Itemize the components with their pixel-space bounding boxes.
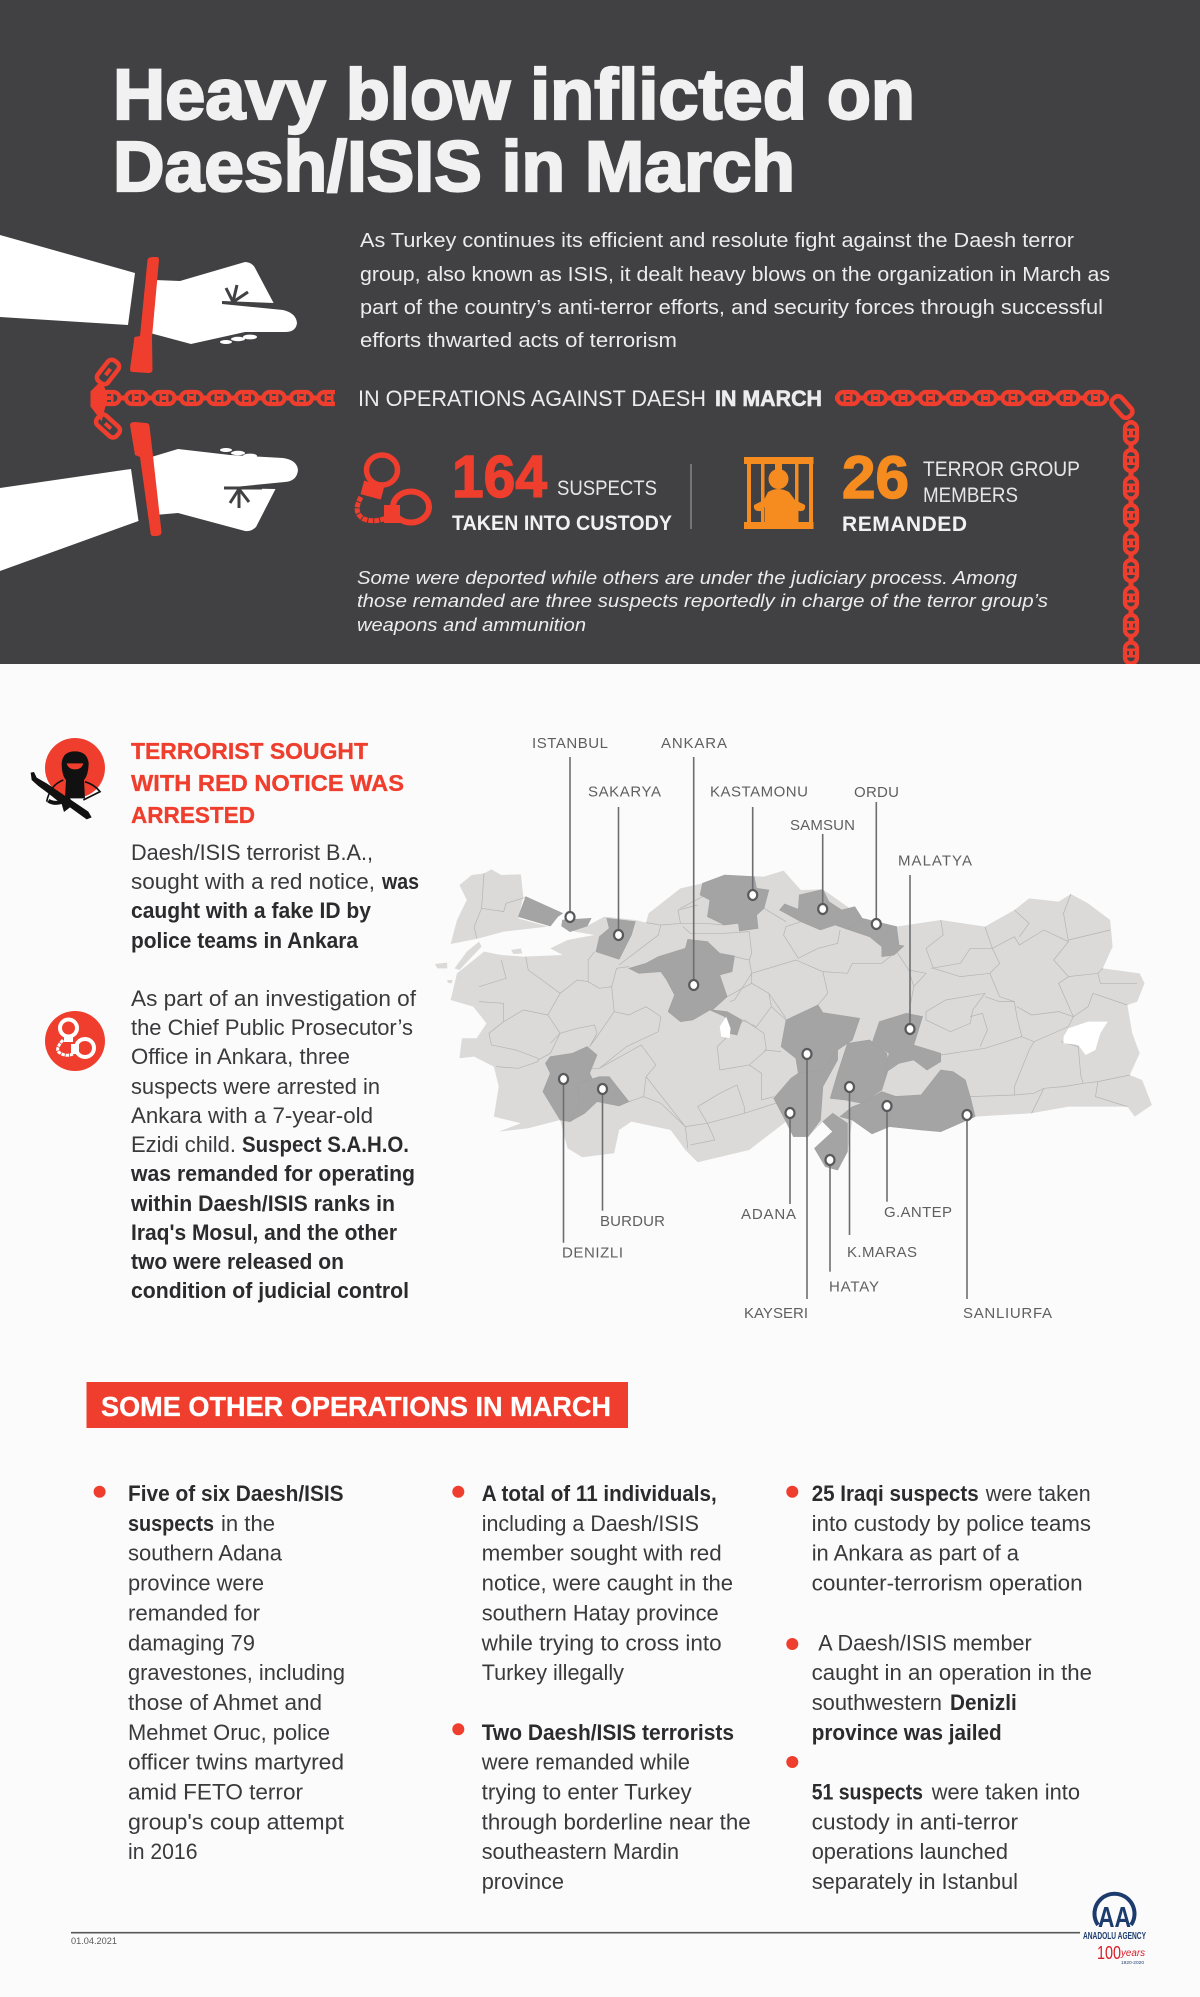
stat: 26 terror group members: TERROR GROUP bbox=[923, 458, 1080, 481]
map: province labels: SANLIURFA bbox=[963, 1305, 1052, 1322]
stat: 164 suspects bbox=[452, 444, 672, 535]
column 2: Hatay and Mardin: notice, were caught in the bbox=[482, 1571, 733, 1596]
text: red notice heading bbox=[131, 738, 404, 828]
column 3: Ankara, Denizli, Istanbul: custody in anti-terror bbox=[812, 1809, 1018, 1834]
map: province labels: ORDU bbox=[854, 784, 899, 801]
italic note bbox=[357, 567, 1048, 635]
intro text: part of the country’s anti-terror efforts, and security forces through successful bbox=[360, 297, 1103, 319]
column 3: Ankara, Denizli, Istanbul: into custody by police teams bbox=[812, 1511, 1091, 1536]
map: province labels: SAMSUN bbox=[790, 817, 855, 834]
footer: rule: 01.04.2021 bbox=[71, 1936, 117, 1946]
logo: Anadolu Agency: years bbox=[1120, 1948, 1145, 1959]
column 2: Hatay and Mardin: through borderline near the bbox=[482, 1809, 751, 1834]
chain: left bbox=[92, 358, 335, 440]
column 3: Ankara, Denizli, Istanbul: were taken bbox=[985, 1481, 1091, 1506]
map: leader lines bbox=[564, 757, 967, 1299]
column 3: Ankara, Denizli, Istanbul: southwestern bbox=[812, 1690, 942, 1715]
intro text: efforts thwarted acts of terrorism bbox=[360, 330, 677, 352]
text: red notice body: police teams in Ankara bbox=[131, 928, 359, 953]
icon: prisoner behind bars bbox=[744, 457, 814, 529]
title: Daesh/ISIS in March bbox=[113, 128, 795, 207]
text: investigation body: Office in Ankara, three bbox=[131, 1044, 350, 1069]
map: province labels: DENIZLI bbox=[562, 1244, 623, 1262]
column 1: gravestones: in 2016 bbox=[128, 1839, 198, 1864]
column 1: gravestones: officer twins martyred bbox=[128, 1750, 344, 1775]
stat: 26 terror group members: MEMBERS bbox=[923, 484, 1018, 507]
icon: masked terrorist bbox=[31, 738, 105, 819]
column 1: gravestones bbox=[94, 1481, 345, 1864]
logo: Anadolu Agency: 1920-2020 bbox=[1121, 1960, 1145, 1965]
column 2: Hatay and Mardin: province bbox=[482, 1869, 564, 1894]
column 2: Hatay and Mardin: while trying to cross into bbox=[481, 1630, 722, 1655]
text: investigation body: As part of an investigation of bbox=[131, 986, 417, 1011]
column 3: Ankara, Denizli, Istanbul: 51 suspects bbox=[812, 1780, 923, 1804]
text: investigation body: Ezidi child. bbox=[131, 1132, 236, 1157]
column 2: Hatay and Mardin: southern Hatay province bbox=[482, 1600, 719, 1625]
text: investigation body: the Chief Public Prosecutor’s bbox=[131, 1015, 413, 1040]
column 2: Hatay and Mardin: trying to enter Turkey bbox=[482, 1780, 692, 1804]
intro text bbox=[360, 230, 1110, 352]
logo: Anadolu Agency bbox=[1083, 1894, 1146, 1965]
text: investigation body: within Daesh/ISIS ranks in bbox=[130, 1191, 395, 1216]
text: investigation body: was remanded for operating bbox=[130, 1161, 415, 1186]
stat: 26 terror group members: REMANDED bbox=[842, 513, 967, 536]
map: province labels: ISTANBUL bbox=[532, 735, 608, 752]
text: investigation body: two were released on bbox=[131, 1249, 344, 1274]
column 2: Hatay and Mardin: member sought with red bbox=[482, 1541, 722, 1566]
column 1: gravestones: Mehmet Oruc, police bbox=[128, 1720, 330, 1745]
text: red notice body bbox=[131, 840, 419, 953]
heading: in operations: IN OPERATIONS AGAINST DAESH bbox=[358, 386, 706, 411]
logo: Anadolu Agency: 100 bbox=[1097, 1943, 1121, 1963]
italic note: weapons and ammunition bbox=[357, 614, 586, 635]
intro text: group, also known as ISIS, it dealt heavy blows on the organization in March as bbox=[360, 264, 1110, 286]
text: investigation body: Iraq's Mosul, and the other bbox=[131, 1220, 397, 1245]
map: province labels: ANKARA bbox=[661, 735, 727, 752]
column 3: Ankara, Denizli, Istanbul: 25 Iraqi suspects bbox=[812, 1481, 979, 1506]
text: investigation body: Ankara with a 7-year-old bbox=[131, 1103, 373, 1128]
column 3: Ankara, Denizli, Istanbul: province was jailed bbox=[812, 1720, 1002, 1745]
text: red notice heading: ARRESTED bbox=[131, 802, 255, 828]
chain: right bbox=[835, 388, 1141, 664]
column 1: gravestones: remanded for bbox=[128, 1600, 260, 1625]
column 1: gravestones: damaging 79 bbox=[128, 1630, 255, 1655]
text: red notice body: Daesh/ISIS terrorist B.A., bbox=[131, 840, 373, 865]
column 2: Hatay and Mardin: Turkey illegally bbox=[482, 1660, 624, 1685]
text: investigation body: Suspect S.A.H.O. bbox=[242, 1132, 409, 1157]
column 1: gravestones: southern Adana bbox=[128, 1541, 283, 1566]
column 3: Ankara, Denizli, Istanbul: caught in an operation in the bbox=[812, 1660, 1092, 1685]
text: red notice body: caught with a fake ID by bbox=[131, 898, 372, 923]
text: red notice heading: WITH RED NOTICE WAS bbox=[131, 770, 404, 796]
column 1: gravestones: gravestones, including bbox=[128, 1660, 345, 1685]
text: investigation body bbox=[130, 986, 417, 1303]
column 2: Hatay and Mardin: Two Daesh/ISIS terrorists bbox=[482, 1720, 734, 1745]
text: investigation body: condition of judicial control bbox=[131, 1278, 409, 1303]
map: province labels: ADANA bbox=[741, 1206, 796, 1223]
map: Turkey provinces bbox=[435, 869, 1152, 1170]
column 1: gravestones: group's coup attempt bbox=[128, 1809, 344, 1834]
map: province labels: BURDUR bbox=[600, 1213, 665, 1230]
column 3: Ankara, Denizli, Istanbul: in Ankara as part of a bbox=[812, 1541, 1020, 1566]
illustration: cuffed hands bbox=[0, 235, 298, 571]
column 1: gravestones: those of Ahmet and bbox=[128, 1690, 322, 1715]
stat: 26 terror group members bbox=[842, 444, 1080, 536]
icon: handcuffs badge bbox=[45, 1011, 105, 1071]
stat: 164 suspects: TAKEN INTO CUSTODY bbox=[452, 512, 672, 535]
map: location pins bbox=[559, 890, 972, 1165]
column 2: Hatay and Mardin: were remanded while bbox=[481, 1750, 690, 1775]
text: red notice heading: TERRORIST SOUGHT bbox=[131, 738, 368, 764]
stat: 26 terror group members: 26 bbox=[842, 444, 909, 511]
stat: 164 suspects: 164 bbox=[452, 444, 547, 510]
column 3: Ankara, Denizli, Istanbul: Denizli bbox=[950, 1690, 1017, 1715]
column 1: gravestones: suspects bbox=[128, 1511, 214, 1536]
column 2: Hatay and Mardin: A total of 11 individuals, bbox=[482, 1481, 717, 1506]
column 1: gravestones: amid FETO terror bbox=[128, 1780, 303, 1804]
column 3: Ankara, Denizli, Istanbul bbox=[786, 1481, 1092, 1894]
column 1: gravestones: Five of six Daesh/ISIS bbox=[128, 1481, 344, 1506]
column 3: Ankara, Denizli, Istanbul: operations launched bbox=[812, 1839, 1008, 1864]
logo: Anadolu Agency: ANADOLU AGENCY bbox=[1083, 1931, 1146, 1942]
panel: dark header bbox=[0, 0, 1200, 664]
map: province labels: KAYSERI bbox=[744, 1305, 808, 1322]
banner: some other operations: SOME OTHER OPERATIONS IN MARCH bbox=[101, 1391, 611, 1422]
stat: 164 suspects: SUSPECTS bbox=[557, 477, 657, 500]
column 2: Hatay and Mardin bbox=[452, 1481, 751, 1894]
banner: some other operations bbox=[86, 1382, 628, 1428]
text: red notice body: was bbox=[381, 869, 419, 894]
logo: Anadolu Agency: AA bbox=[1098, 1902, 1131, 1934]
map: province labels: G.ANTEP bbox=[884, 1204, 952, 1221]
column 2: Hatay and Mardin: southeastern Mardin bbox=[482, 1839, 679, 1864]
column 1: gravestones: in the bbox=[221, 1511, 275, 1536]
icon: handcuffs bbox=[357, 455, 429, 523]
text: red notice body: sought with a red notice, bbox=[131, 869, 375, 894]
map: province labels: KASTAMONU bbox=[710, 784, 808, 800]
column 1: gravestones: province were bbox=[128, 1571, 264, 1596]
column 3: Ankara, Denizli, Istanbul: were taken into bbox=[931, 1780, 1080, 1804]
text: investigation body: suspects were arrested in bbox=[131, 1074, 380, 1099]
map: province labels: MALATYA bbox=[898, 852, 972, 870]
map: province labels bbox=[532, 735, 1052, 1322]
column 3: Ankara, Denizli, Istanbul: A Daesh/ISIS member bbox=[818, 1630, 1032, 1655]
map: province labels: SAKARYA bbox=[588, 784, 661, 800]
column 3: Ankara, Denizli, Istanbul: separately in Istanbul bbox=[812, 1869, 1018, 1894]
map: province labels: HATAY bbox=[829, 1278, 879, 1296]
intro text: As Turkey continues its efficient and resolute fight against the Daesh terror bbox=[360, 230, 1074, 252]
heading: in operations: IN MARCH bbox=[715, 386, 822, 411]
italic note: Some were deported while others are under the judiciary process. Among bbox=[357, 567, 1018, 588]
map: province labels: K.MARAS bbox=[847, 1244, 917, 1261]
column 3: Ankara, Denizli, Istanbul: counter-terrorism operation bbox=[812, 1571, 1083, 1596]
title bbox=[113, 56, 915, 207]
title: Heavy blow inflicted on bbox=[113, 56, 915, 135]
column 2: Hatay and Mardin: including a Daesh/ISIS bbox=[482, 1511, 699, 1536]
italic note: those remanded are three suspects reportedly in charge of the terror group’s bbox=[357, 590, 1048, 611]
